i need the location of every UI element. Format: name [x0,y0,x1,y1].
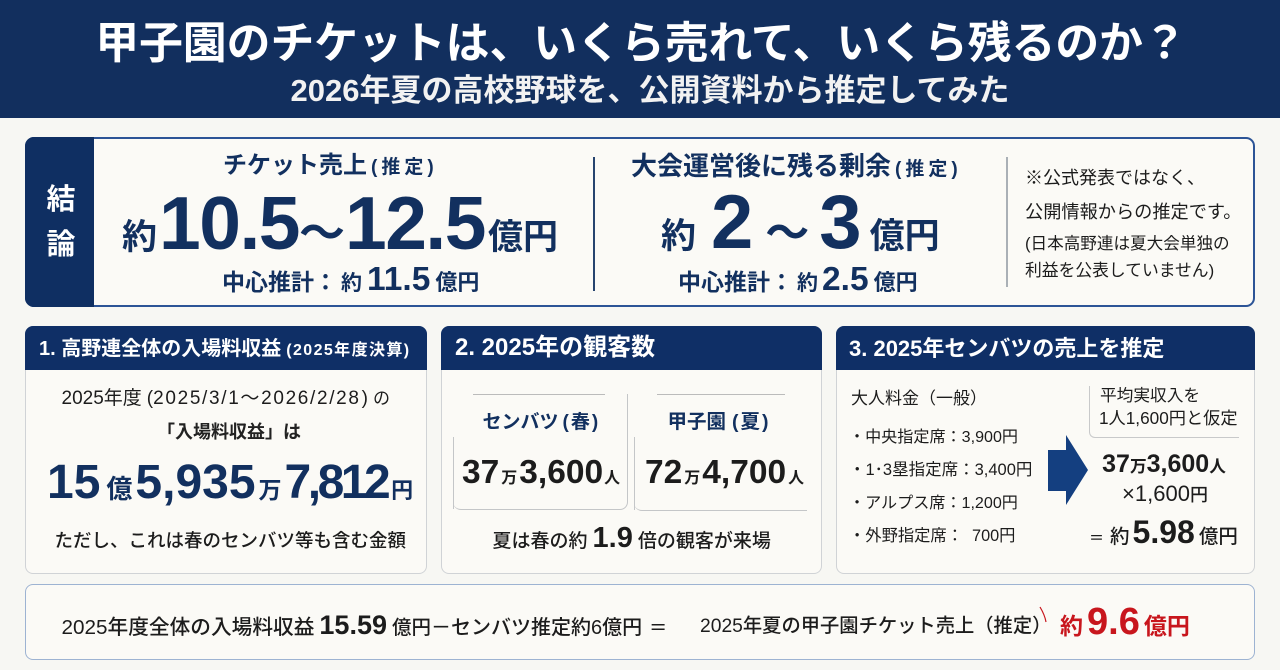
surplus value: 約 [661,217,696,256]
koshien label: 甲子園 [668,411,726,433]
senbatsu box [453,394,628,510]
equation left [62,610,667,640]
koshien figure: 万 [684,470,700,487]
bottom equation panel [25,584,1255,660]
surplus central estimate: 約 [797,272,818,295]
card 1 amount [47,456,413,509]
card 3 header [836,326,1255,370]
calculation: 3,600 [1147,450,1209,478]
card 2 header: 2. 2025年の観客数 [455,334,655,361]
calculation: ＝ [1089,530,1104,546]
surplus value: 2 [711,180,753,265]
price list: 大人料金（一般） [851,389,987,408]
ticket sales central estimate: 中心推計： [222,269,337,295]
conclusion label tab: 結 [46,184,76,216]
calculation: 37 [1102,450,1130,478]
surplus central estimate: 2.5 [822,261,869,298]
price list [849,389,1032,545]
vertical divider [593,157,595,291]
note: 公開情報からの推定です。 [1025,202,1241,222]
card 1 period text: の [373,389,390,408]
card 1 amount: 15 [47,456,100,509]
card 1 label: 「入場料収益」は [157,422,301,442]
equation right: 2025年夏の甲子園チケット売上（推定） [700,616,1051,636]
ticket sales value [122,180,558,264]
red accent stroke [1040,606,1047,622]
surplus value [661,180,940,265]
arrow [1048,435,1088,505]
ticket sales value: 12.5 [345,180,485,264]
card 2 comparison: 1.9 [593,522,633,554]
card 2: attendance [441,326,822,574]
assumption box [1089,386,1239,438]
ticket sales central estimate: 約 [341,272,362,295]
card 1 period text: 2025/3/1～2026/2/28 [153,388,361,409]
ticket sales value: 約 [122,218,157,256]
card 2 header [441,326,822,370]
note [1025,168,1241,280]
card 1 amount: 5,935 [135,456,256,509]
ticket sales central estimate [222,261,479,298]
equation left: 億円 [392,616,431,638]
senbatsu figure: 人 [604,470,620,487]
price list: ・中央指定席：3,900円 [849,428,1018,446]
divider [1006,157,1008,287]
surplus value: ～ [765,209,809,258]
card 1 period text: ( [147,388,153,409]
card 2 comparison: 夏は春の約 [492,531,588,552]
note: ※公式発表ではなく、 [1025,168,1205,188]
surplus central estimate: 中心推計： [678,269,793,295]
card 1 footnote: ただし、これは春のセンバツ等も含む金額 [54,530,406,551]
panel: conclusion [25,137,1255,307]
calculation: 万 人 [1130,456,1226,476]
calculation: 約 [1110,526,1130,548]
price list: ・外野指定席： 700円 [849,527,1015,545]
result value: 億円 [1144,612,1190,638]
koshien figure: 4,700 [702,454,786,491]
header banner [0,0,1280,118]
subtitle: 2026年夏の高校野球を、公開資料から推定してみた [290,73,1010,108]
card 1 period text [62,388,390,409]
conclusion label tab [25,137,94,307]
equation left: 2025年度全体の入場料収益 [62,616,314,638]
note: (日本高野連は夏大会単独の [1025,234,1230,253]
card 1 header: 1. 高野連全体の入場料収益 [39,338,281,360]
result value: 9.6 [1087,600,1140,642]
card 1 amount: 億 [106,474,132,504]
ticket sales central estimate: 億円 [435,270,479,295]
card 1 amount: 円 [391,478,413,503]
price list: ・1･3塁指定席：3,400円 [849,461,1032,479]
result value: 約 [1060,612,1083,638]
calculation: ×1,600 [1122,481,1190,506]
calculation: 億円 [1199,526,1238,548]
senbatsu figure: 37 [462,454,499,491]
surplus value: 億円 [870,217,940,256]
card 2 comparison [492,522,771,554]
senbatsu label: センバツ [482,412,559,433]
card 3: senbatsu sales estimate [836,326,1255,574]
koshien figure [645,454,804,491]
senbatsu label: (春) [563,412,600,433]
koshien figure: 72 [645,454,682,491]
card 1 amount: 万 [259,477,282,503]
ticket sales heading: チケット売上 [223,152,367,179]
result value [1060,600,1190,642]
ticket sales value: ～ [299,206,345,258]
surplus heading: (推定) [895,159,962,180]
title: 甲子園のチケットは、いくら売れて、いくら残るのか？ [95,19,1187,68]
card 3 header: 3. 2025年センバツの売上を推定 [849,336,1164,361]
surplus central estimate: 億円 [874,270,918,295]
card 1 header: (2025年度決算) [286,342,411,359]
ticket sales central estimate: 11.5 [367,261,430,298]
note: 利益を公表していません) [1025,261,1214,280]
price list: ・アルプス席：1,200円 [849,494,1018,512]
card 1 amount: 7,812 [285,456,387,509]
card 1 header [25,326,427,370]
senbatsu figure: 3,600 [519,454,603,491]
equation left: 15.59 [319,610,387,640]
conclusion label tab: 論 [46,229,76,261]
card 1: admission revenue [25,326,427,574]
senbatsu label [482,412,600,433]
surplus heading: 大会運営後に残る剰余 [631,151,891,181]
assumption box: 平均実収入を [1100,386,1200,405]
card 1 period text: ) [362,388,368,409]
ticket sales value: 億円 [488,218,558,256]
surplus value: 3 [819,180,862,265]
koshien label [668,411,771,433]
ticket sales heading [223,152,438,179]
koshien label: (夏) [732,411,771,433]
ticket sales heading: (推定) [371,157,438,178]
calculation [1089,450,1238,550]
calculation: 円 [1190,485,1208,505]
senbatsu figure [462,454,620,491]
equation left: ＝ [649,618,667,638]
koshien figure: 人 [788,470,804,487]
senbatsu figure: 万 [501,470,517,487]
calculation: 5.98 [1133,514,1195,550]
card 1 period text: 2025年度 [62,388,142,409]
ticket sales value: 10.5 [159,180,299,264]
surplus central estimate [678,261,918,298]
card 2 comparison: 倍の観客が来場 [638,531,771,552]
equation left: －センバツ推定約6億円 [431,616,642,638]
assumption box: 1人1,600円と仮定 [1099,408,1238,428]
koshien box [634,394,807,511]
